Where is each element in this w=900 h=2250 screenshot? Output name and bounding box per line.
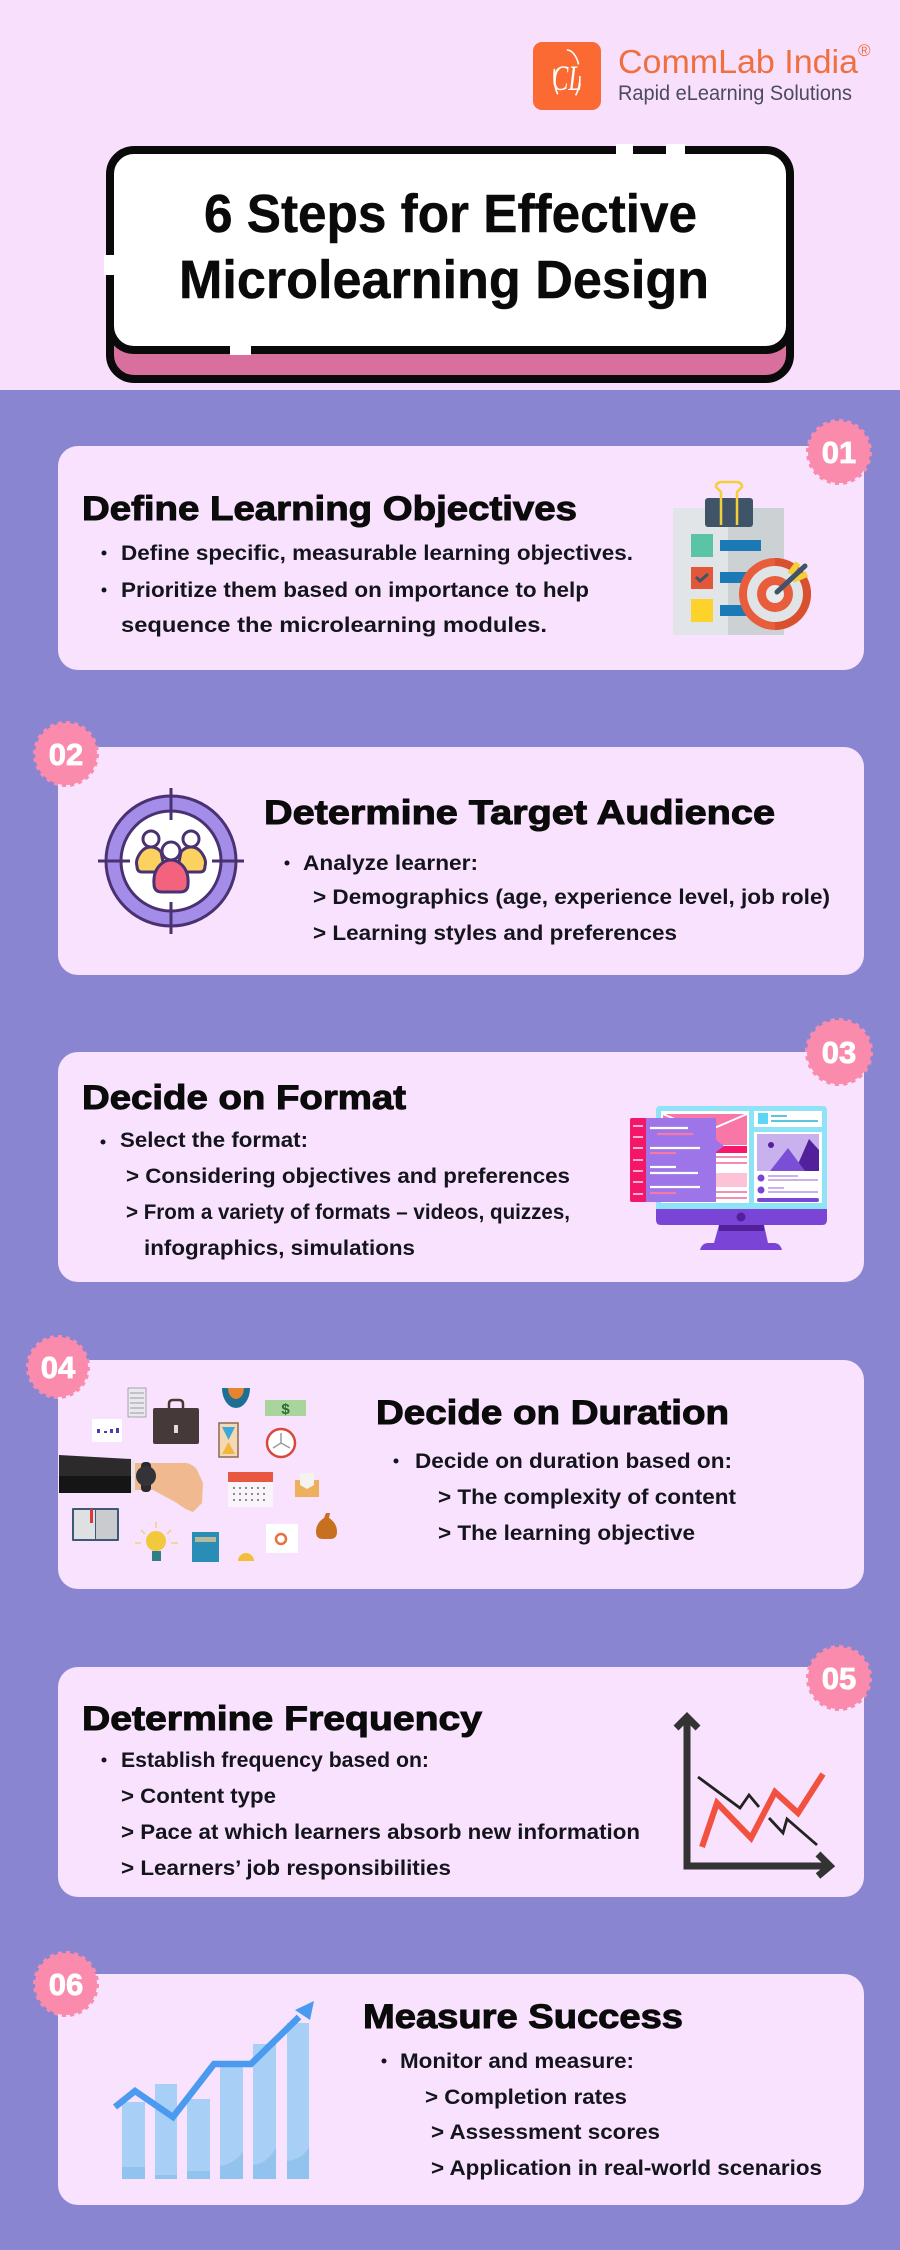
badge: 04: 04 <box>41 1350 76 1385</box>
title text: Microlearning Design <box>179 250 709 310</box>
body text: step 6: Monitor and measure: <box>400 2050 634 2073</box>
title text <box>179 184 709 310</box>
logo: CommLab India <box>533 41 871 110</box>
body text: step 3: > From a variety of formats – videos, quizzes, <box>126 1201 570 1224</box>
body text: step 6: > Assessment scores <box>431 2121 660 2144</box>
title text: 6 Steps for Effective <box>204 184 697 244</box>
body text: step 5: > Learners’ job responsibilities <box>121 1857 451 1880</box>
body text: step 6: > Application in real-world scenarios <box>431 2157 822 2180</box>
body text: step 5: > Pace at which learners absorb new information <box>121 1821 640 1844</box>
icon: audience crosshair <box>98 788 244 934</box>
body text: step 5 <box>102 1749 640 1880</box>
panel: step 2 determine target audience <box>58 747 864 975</box>
icon: wristwatch and business objects: $ <box>281 1401 290 1418</box>
heading: decide on format: Decide on Format <box>82 1079 406 1117</box>
panel: step 5 determine frequency <box>58 1667 864 1897</box>
body text: step 1: sequence the microlearning modules. <box>121 614 547 637</box>
body text: step 4 <box>394 1450 736 1545</box>
body text: step 6 <box>382 2050 822 2180</box>
panel: step 1 define learning objectives <box>58 446 864 670</box>
logo: CommLab India: CommLab India <box>618 43 859 80</box>
heading: decide on duration: Decide on Duration <box>376 1394 729 1432</box>
body text: step 2 <box>284 852 830 945</box>
badge: 06 <box>35 1953 97 2015</box>
icon: wristwatch and business objects <box>59 1388 337 1562</box>
title box <box>104 144 790 379</box>
icon: clipboard with target <box>673 482 811 635</box>
heading: determine target audience: Determine Target Audience <box>264 794 775 832</box>
body text: step 4: > The learning objective <box>438 1522 695 1545</box>
badge: 01 <box>808 421 870 483</box>
heading: measure success: Measure Success <box>363 1998 683 2036</box>
body text: step 2: > Learning styles and preferences <box>313 922 677 945</box>
logo: CommLab India: CL <box>552 58 582 98</box>
logo: CommLab India: Rapid eLearning Solutions <box>618 82 852 105</box>
badge: 05 <box>808 1647 870 1709</box>
body text: step 4: > The complexity of content <box>438 1486 736 1509</box>
body text: step 3 <box>100 1129 570 1260</box>
icon: rising bar chart with arrow <box>115 2001 314 2179</box>
body text: step 5: Establish frequency based on: <box>121 1749 429 1772</box>
body text: step 4: Decide on duration based on: <box>415 1450 732 1473</box>
body text: step 2: > Demographics (age, experience level, job role) <box>313 886 830 909</box>
icon: line chart with axes <box>676 1717 830 1876</box>
body text: step 3: Select the format: <box>120 1129 308 1152</box>
badge: 01: 01 <box>822 435 856 470</box>
panel: step 4 decide on duration <box>58 1360 864 1589</box>
badge: 02: 02 <box>49 737 83 772</box>
body text: step 5: > Content type <box>121 1785 276 1808</box>
heading: define learning objectives: Define Learning Objectives <box>82 490 577 528</box>
body text: step 2: Analyze learner: <box>303 852 478 875</box>
body text: step 1 <box>102 542 633 637</box>
body text: step 1: Define specific, measurable learning objectives. <box>121 542 633 565</box>
badge: 04 <box>28 1337 88 1397</box>
panel: step 3 decide on format <box>58 1052 864 1282</box>
badge: 03: 03 <box>822 1035 856 1070</box>
badge: 03 <box>807 1020 871 1084</box>
logo: CommLab India: ® <box>858 41 871 60</box>
heading: determine frequency: Determine Frequency <box>82 1700 482 1738</box>
panel: step 6 measure success <box>58 1974 864 2205</box>
body text: step 3: > Considering objectives and preferences <box>126 1165 570 1188</box>
icon: monitor with interface screens <box>630 1106 827 1250</box>
badge: 02 <box>35 723 97 785</box>
badge: 05: 05 <box>822 1661 856 1696</box>
body text: step 3: infographics, simulations <box>144 1237 415 1260</box>
body text: step 6: > Completion rates <box>425 2086 627 2109</box>
badge: 06: 06 <box>49 1967 83 2002</box>
body text: step 1: Prioritize them based on importance to help <box>121 579 589 602</box>
